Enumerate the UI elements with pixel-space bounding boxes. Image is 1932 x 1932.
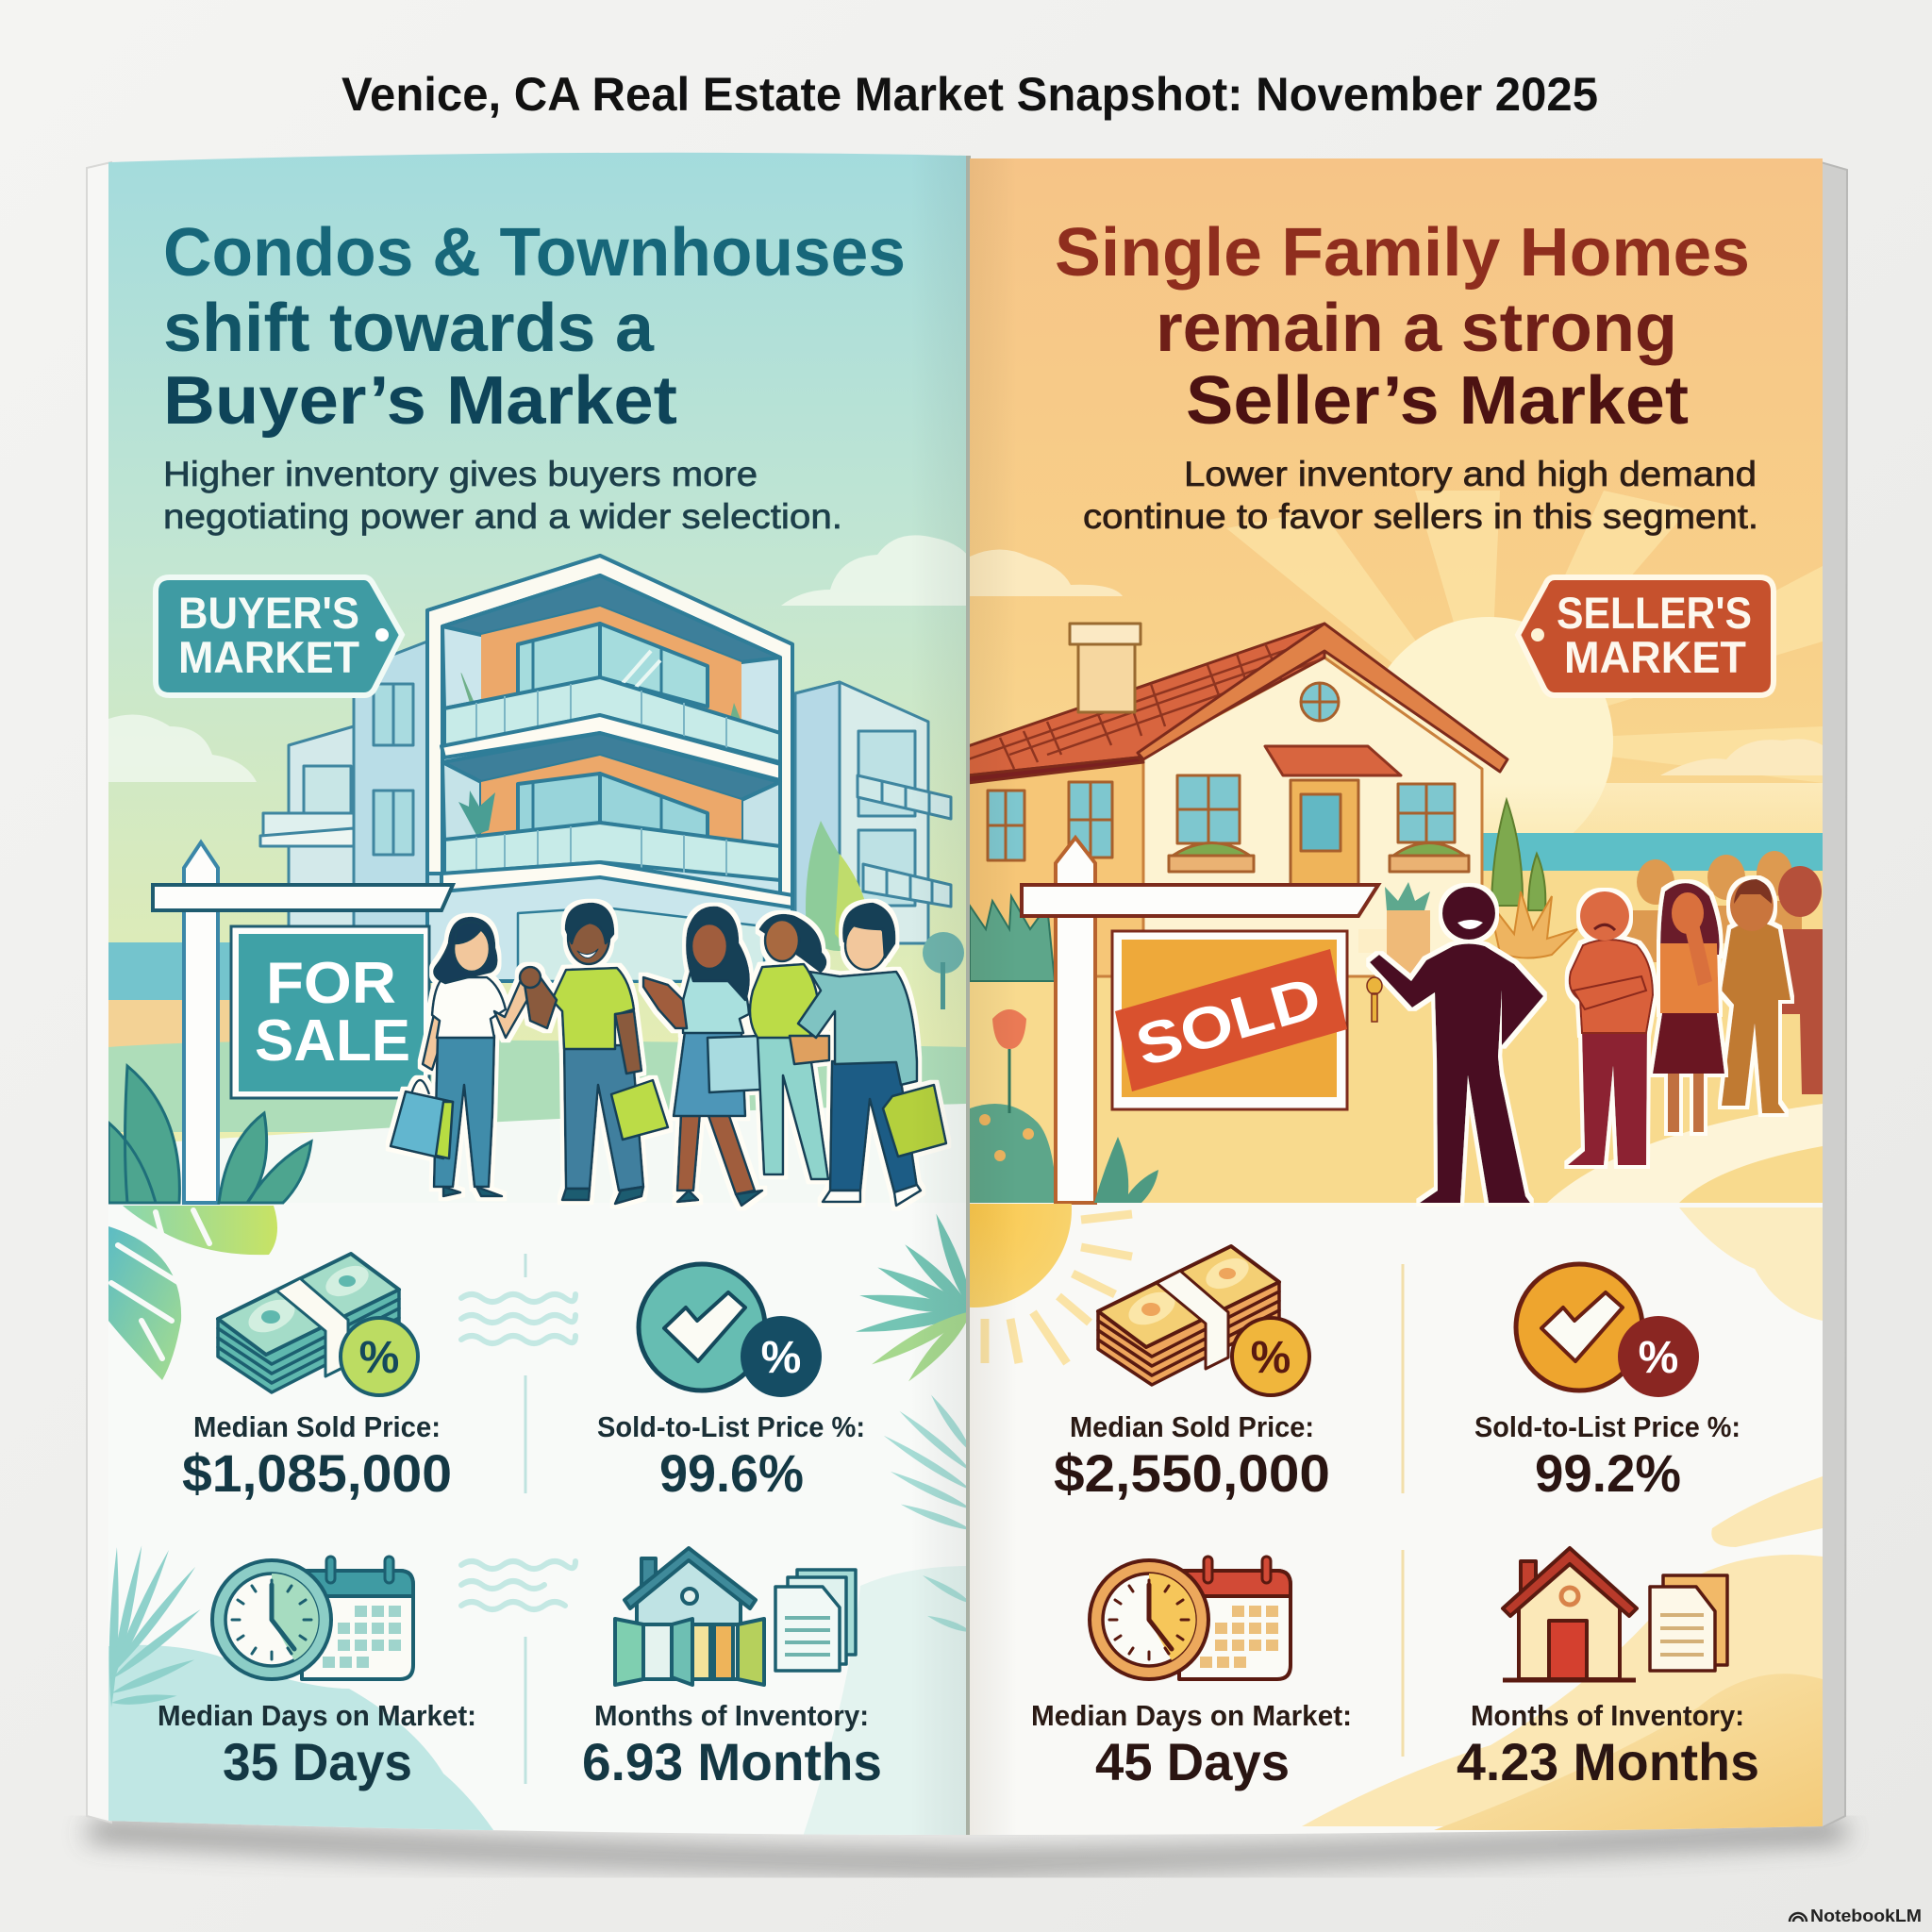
tag text line 1: SELLER'S [1557, 588, 1752, 638]
stat: sold to list homes [1474, 1264, 1740, 1503]
worried woman [1653, 883, 1724, 1132]
left page lower paper [108, 1203, 969, 1844]
label: Sold-to-List Price %: [1474, 1410, 1740, 1443]
bush and flower [970, 896, 1057, 1203]
right subheading: Lower inventory and high demand [1184, 455, 1757, 493]
value: $2,550,000 [1054, 1443, 1330, 1503]
wave ornament 2 [461, 1561, 575, 1609]
icon: money stack [218, 1254, 399, 1392]
icon: percent badge: % [1639, 1333, 1678, 1383]
sea and beach [108, 942, 969, 1203]
icon: percent badge [341, 1318, 418, 1395]
palm top right [855, 1211, 977, 1386]
right page stack edge [1821, 162, 1847, 1828]
tag text line 2: MARKET [1564, 632, 1746, 682]
seller with key [1370, 887, 1543, 1203]
fern right [882, 1392, 974, 1635]
right page lower paper [968, 1203, 1826, 1844]
sand wave [1302, 1476, 1823, 1826]
sun glow and rays [1226, 491, 1823, 866]
left subheading: negotiating power and a wider selection. [163, 497, 842, 536]
for sale board [231, 926, 429, 1098]
group of buyers [391, 904, 946, 1206]
seller's market tag [1518, 577, 1774, 695]
icon: percent badge [741, 1316, 822, 1397]
arms crossed man [1568, 891, 1653, 1165]
buyer 3 [643, 908, 762, 1206]
tag hole [375, 628, 389, 641]
windows [988, 775, 1455, 860]
key [1367, 977, 1382, 1022]
waiting buyers crowd [1568, 851, 1823, 1165]
left heading: Buyer’s Market [163, 363, 677, 439]
icon: check circle [1516, 1264, 1642, 1391]
right dividers [1402, 1264, 1404, 1757]
buyer 4 [750, 915, 828, 1179]
stat: median days condos [158, 1557, 476, 1791]
panel: single family homes page [875, 151, 1826, 1844]
sold banner [1115, 949, 1347, 1091]
buyer 3 shopping bag [708, 1036, 761, 1092]
main condo building [427, 556, 792, 981]
background silhouettes [1624, 851, 1802, 962]
sea [1483, 833, 1823, 871]
buyer 1 shopping bag [391, 1080, 453, 1158]
label: Months of Inventory: [1471, 1699, 1744, 1732]
house [968, 623, 1507, 976]
agave plant [1489, 891, 1577, 958]
palm top left teal leaf [108, 1226, 181, 1380]
buyer 4 handbag [790, 1036, 829, 1064]
right subheading: continue to favor sellers in this segment. [1083, 497, 1758, 536]
value: 35 Days [223, 1732, 412, 1791]
palm leaf slits [111, 1210, 209, 1358]
for sale text: FOR [266, 951, 396, 1016]
roof [968, 624, 1324, 775]
left heading: Condos & Townhouses [163, 215, 906, 291]
label: Median Sold Price: [1070, 1410, 1314, 1443]
for sale panel [239, 934, 424, 1091]
steps and pot [1358, 882, 1430, 976]
watermark text: NotebookLM [1810, 1907, 1922, 1925]
icon: house [1503, 1548, 1637, 1680]
right subheading [1083, 455, 1758, 536]
icon: clock and calendar [212, 1557, 413, 1679]
clouds [970, 549, 1823, 775]
stat: median days homes [1031, 1557, 1352, 1791]
foreground plants [1094, 1137, 1158, 1203]
watermark [1790, 1907, 1922, 1925]
value: 4.23 Months [1457, 1732, 1759, 1791]
tree [806, 821, 964, 1009]
stat: median sold price homes [1054, 1246, 1330, 1503]
deep sand [1434, 1674, 1823, 1830]
stat: median sold price condos [182, 1254, 452, 1503]
sun rays [985, 1214, 1132, 1363]
sale text: SALE [255, 1008, 410, 1074]
value: 6.93 Months [582, 1732, 882, 1791]
wave ornament 1 [461, 1294, 575, 1343]
icon: percent badge [1232, 1318, 1309, 1395]
sign board [1112, 931, 1347, 1109]
panel: condos and townhouses page [108, 146, 977, 1844]
roof tiles [968, 623, 1324, 769]
teal wash [108, 1645, 500, 1840]
planters [1169, 843, 1469, 872]
buyer 5 [798, 904, 921, 1206]
chimney [1070, 624, 1141, 712]
label: Median Days on Market: [1031, 1699, 1352, 1732]
back building wings [260, 641, 951, 976]
tag shape [156, 577, 402, 695]
value: 45 Days [1095, 1732, 1290, 1791]
left page stack edge [87, 162, 111, 1823]
round window [1301, 683, 1339, 721]
for sale sign [153, 842, 453, 1203]
red silhouette [1778, 866, 1823, 1094]
sold text: SOLD [1129, 965, 1328, 1079]
icon: clock and calendar [1090, 1557, 1291, 1679]
foreground leaves [108, 1066, 311, 1203]
value: 99.2% [1535, 1443, 1681, 1503]
label: Months of Inventory: [594, 1699, 869, 1732]
left heading: shift towards a [163, 291, 655, 366]
value: 99.6% [659, 1443, 804, 1503]
stat: months of inventory homes [1457, 1548, 1759, 1791]
icon: documents [1650, 1575, 1727, 1671]
palm top left lime leaf [123, 1206, 277, 1255]
left subheading [163, 455, 842, 536]
barge board [1138, 624, 1507, 772]
right page sky background [968, 151, 1826, 1203]
label: Median Sold Price: [193, 1410, 441, 1443]
pale wash [802, 1566, 969, 1840]
cypress trees [1491, 800, 1545, 910]
buyer 2 [520, 904, 643, 1204]
tag shape [1518, 577, 1774, 695]
sand wash [1679, 1208, 1823, 1321]
left heading [163, 215, 906, 439]
right heading: Single Family Homes [1055, 215, 1750, 291]
sign post [184, 842, 218, 1203]
roof underside [968, 758, 1143, 783]
sign crossbar [1022, 885, 1378, 916]
icon: percent badge: % [761, 1333, 801, 1383]
book shadow [85, 1821, 1849, 1873]
title: Venice, CA Real Estate Market Snapshot: November 2025 [341, 68, 1598, 121]
stat: months of inventory condos [582, 1548, 882, 1791]
icon: documents [775, 1570, 856, 1671]
label: Median Days on Market: [158, 1699, 476, 1732]
right heading: remain a strong [1156, 291, 1677, 366]
right heading: Seller’s Market [1186, 363, 1689, 439]
sand ground [970, 871, 1823, 1203]
door [1265, 746, 1401, 885]
right lower decorations [875, 1111, 1823, 1830]
left page sky background [108, 146, 969, 1203]
gutter line [966, 156, 971, 1835]
right heading [1055, 215, 1750, 439]
icon: house with open doors [615, 1548, 764, 1685]
clouds [108, 535, 969, 782]
icon: percent badge: % [1251, 1333, 1291, 1383]
beach path [1547, 1104, 1823, 1203]
fern left [108, 1544, 203, 1707]
buyer 1 [423, 918, 536, 1196]
tag text line 1: BUYER'S [178, 588, 359, 638]
gold panel [1122, 940, 1337, 1097]
buyer 2 shopping bag [611, 1080, 668, 1140]
icon: money stack [1098, 1246, 1279, 1385]
orange man [1722, 879, 1790, 1113]
sold sign [1022, 838, 1378, 1203]
left dividers [525, 1254, 526, 1784]
left lower decorations [108, 1206, 977, 1840]
value: $1,085,000 [182, 1443, 452, 1503]
sign crossbar [153, 885, 453, 910]
tag text line 2: MARKET [178, 632, 359, 682]
label: Sold-to-List Price %: [597, 1410, 865, 1443]
icon: percent badge [1618, 1316, 1699, 1397]
tag hole [1531, 628, 1544, 641]
buyer 5 shopping bag [883, 1085, 946, 1157]
icon: check circle [639, 1264, 765, 1391]
buyer's market tag [156, 577, 402, 695]
stat: sold to list condos [597, 1264, 865, 1503]
left subheading: Higher inventory gives buyers more [163, 455, 758, 493]
sign post [1056, 838, 1095, 1203]
sun [875, 1111, 1072, 1307]
watermark icon [1790, 1913, 1807, 1922]
icon: percent badge: % [359, 1333, 399, 1383]
